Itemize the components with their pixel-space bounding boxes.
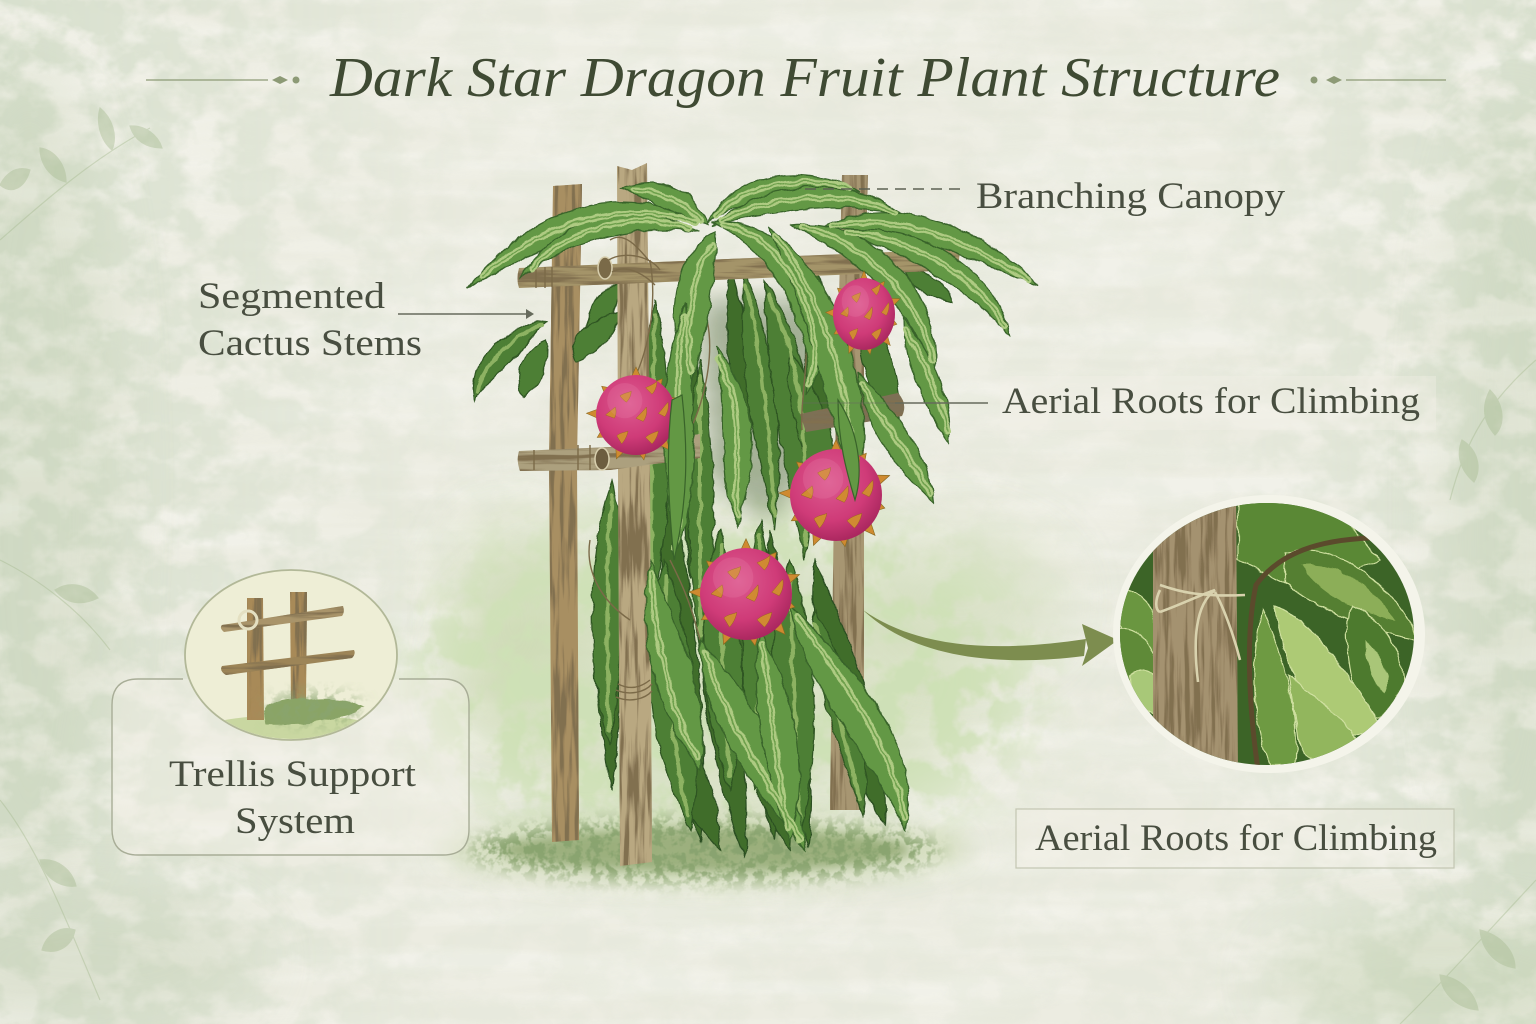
trellis front post	[617, 163, 652, 866]
arrow: to detail inset	[863, 610, 1118, 666]
top crossbar	[518, 249, 960, 288]
label: Aerial Roots for Climbing, lower	[1016, 809, 1454, 868]
back stems	[473, 270, 952, 840]
aerial root	[1249, 538, 1370, 770]
crossbar cut end: top	[598, 257, 612, 279]
plant and trellis illustration	[440, 163, 1038, 886]
panel: trellis support system	[112, 570, 469, 855]
fruit: upper right	[825, 271, 901, 355]
detail inset: post and aerial root	[1113, 495, 1425, 775]
text: Trellis Support System: System	[235, 801, 355, 842]
label: Aerial Roots for Climbing, upper	[802, 376, 1436, 430]
fruit: lower centre	[689, 539, 801, 646]
arrow: stems pointer	[398, 309, 534, 319]
shaded recess	[700, 300, 830, 520]
fruit: middle right	[779, 440, 891, 547]
label: Segmented Cactus Stems: Cactus Stems	[198, 323, 422, 364]
text: Trellis Support System: Trellis Support	[169, 754, 417, 795]
trellis left post	[549, 184, 582, 842]
overlapping stem on left fruit	[668, 395, 686, 560]
stem tip over middle fruit	[838, 400, 859, 500]
icon: mini trellis in oval	[185, 570, 397, 755]
label: Aerial Roots for Climbing, upper: Aerial Roots for Climbing	[1002, 381, 1420, 422]
label: Segmented Cactus Stems: Segmented	[198, 276, 386, 317]
front stems	[468, 174, 1038, 850]
text: Trellis Support System	[169, 754, 417, 842]
lower left crossbar	[518, 434, 700, 471]
label: Segmented Cactus Stems	[198, 276, 534, 364]
label: Aerial Roots for Climbing, lower: Aerial Roots for Climbing	[1035, 818, 1437, 859]
twine ties	[534, 237, 806, 700]
fruit: left	[586, 367, 684, 461]
inset leaves	[1118, 500, 1418, 765]
ground grass	[440, 814, 970, 886]
title ornament: right	[1310, 76, 1446, 84]
twine knot	[1156, 585, 1245, 682]
title: Dark Star Dragon Fruit Plant Structure	[329, 47, 1280, 109]
trellis back right post	[830, 175, 868, 810]
long hanging stems	[593, 260, 885, 858]
title ornament: left	[146, 76, 300, 84]
crossbar cut end: lower	[595, 448, 609, 470]
right crossbar	[800, 393, 904, 432]
background foliage behind plant	[415, 510, 1060, 850]
label: Branching Canopy: Branching Canopy	[976, 176, 1286, 217]
inset post	[1153, 495, 1238, 775]
